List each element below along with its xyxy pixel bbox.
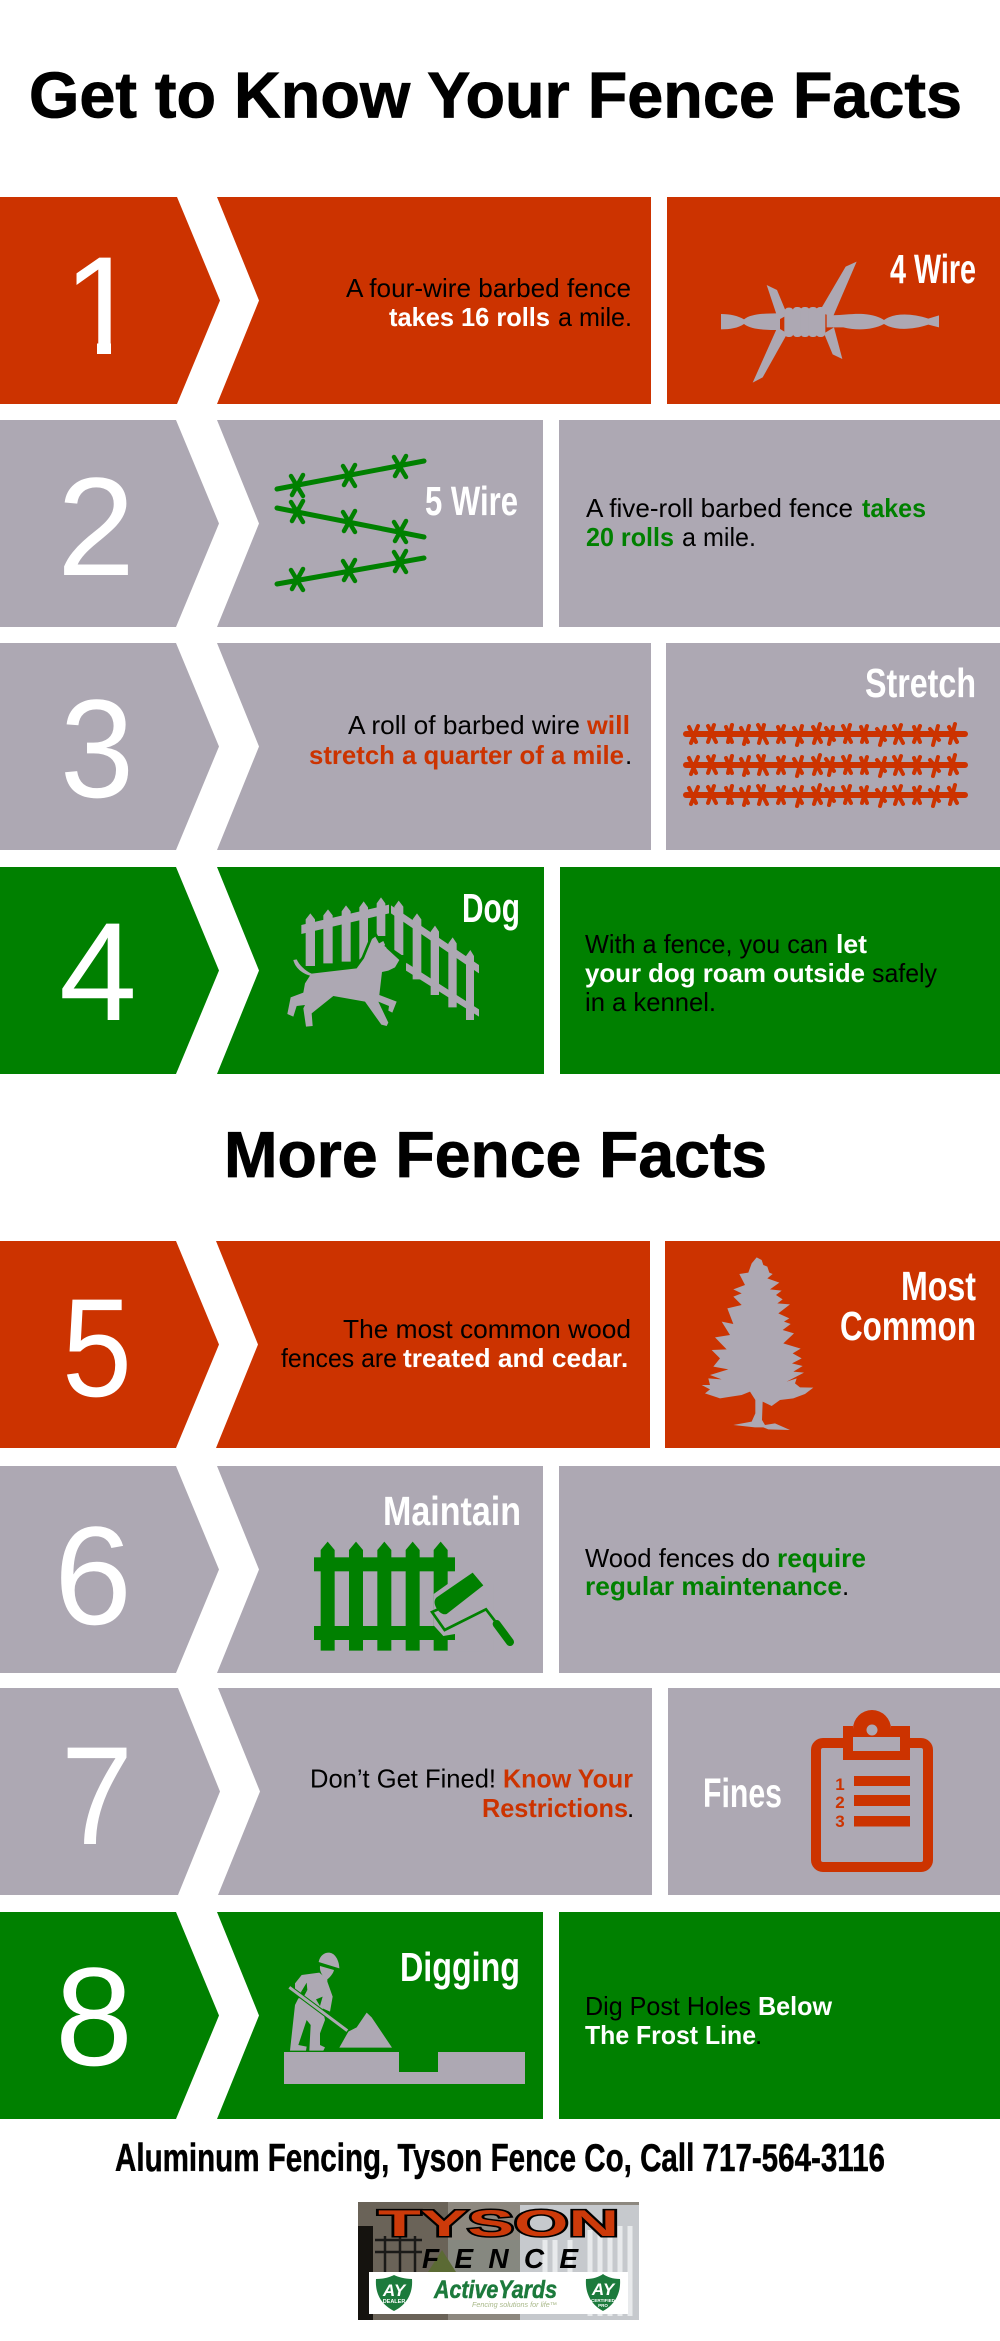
icon: man digging post hole (284, 1953, 525, 2084)
label: Most Common (840, 1263, 976, 1349)
number block 5: 5 (62, 1269, 132, 1426)
text panel: restrictions: Don’t Get Fined! (310, 1764, 496, 1794)
icon panel: digging (217, 1912, 543, 2119)
number block 4: 4 (59, 893, 137, 1050)
label: Most Common: Most (901, 1263, 976, 1309)
number block 6: 6 (54, 1497, 132, 1654)
logo photo background (358, 2202, 639, 2320)
label: Maintain: Maintain (383, 1488, 521, 1534)
icon panel: most common (665, 1241, 1000, 1448)
text panel: four-wire fence: a mile. (558, 302, 632, 332)
text panel: five-roll fence (559, 420, 1000, 627)
ActiveYards tagline: Fencing solutions for life™ (472, 2302, 557, 2309)
text panel: restrictions (218, 1688, 652, 1895)
text panel: roll stretch: stretch a quarter of a mile (309, 740, 624, 770)
text panel: frost line (559, 1912, 1000, 2119)
fact row 4 (0, 867, 1000, 1074)
text panel: five-roll fence: A five-roll barbed fence (586, 493, 853, 523)
section heading: More Fence Facts (224, 1118, 767, 1191)
text panel: roll stretch: A roll of barbed wire (348, 710, 580, 740)
badge: AY certified pro: CERTIFIED (591, 2298, 616, 2303)
text panel: roll stretch: will (586, 710, 630, 740)
number block 7 (0, 1688, 220, 1895)
text panel: frost line: Below (758, 1991, 833, 2021)
text panel: dog in a kennel: With a fence, you can (585, 929, 828, 959)
text panel: frost line: The Frost Line (585, 2020, 756, 2050)
number block 3: 3 (60, 670, 134, 827)
label: Dog: Dog (462, 885, 520, 931)
text panel: four-wire fence: A four-wire barbed fence (346, 273, 631, 303)
badge: AY dealer (376, 2275, 412, 2311)
text panel: dog in a kennel: safely (872, 958, 937, 988)
icon: dog and fence (287, 897, 479, 1027)
fact row 8 (0, 1912, 1000, 2119)
number block 6 (0, 1466, 219, 1673)
badge: AY certified pro (586, 2274, 620, 2311)
number block 8: 8 (55, 1938, 133, 2095)
text panel: frost line: Dig Post Holes (585, 1991, 751, 2021)
logo wordmark: TYSON: TYSON (378, 2203, 619, 2244)
text panel: five-roll fence: a mile. (682, 522, 756, 552)
text panel: maintenance (559, 1466, 1000, 1673)
number block 3 (0, 643, 219, 850)
text panel: common woods: The most common wood (343, 1314, 631, 1344)
number block 5 (0, 1241, 219, 1448)
text panel: four-wire fence: takes 16 rolls (389, 302, 550, 332)
icon panel: 4 wire (667, 197, 1000, 404)
fact row 7 (0, 1688, 1000, 1895)
text panel: four-wire fence (217, 197, 651, 404)
text panel: dog in a kennel: in a kennel. (585, 987, 716, 1017)
badge: AY certified pro: AY (591, 2280, 616, 2299)
fact row 5 (0, 1241, 1000, 1448)
icon: clipboard checklist (816, 1710, 928, 1867)
text panel: maintenance: . (842, 1571, 849, 1601)
title: Get to Know Your Fence Facts (29, 58, 962, 132)
text panel: maintenance: Wood fences do (585, 1543, 770, 1573)
text panel: dog in a kennel: your dog roam outside (585, 958, 865, 988)
icon panel: maintain (217, 1466, 543, 1673)
text panel: restrictions: . (627, 1793, 634, 1823)
text panel: dog in a kennel: let (836, 929, 867, 959)
icon panel: 5 wire (217, 420, 543, 627)
text panel: frost line: . (755, 2020, 762, 2050)
text panel: common woods (216, 1241, 650, 1448)
text panel: dog in a kennel (560, 867, 1000, 1074)
icon: picket fence and paint roller (314, 1542, 510, 1652)
number block 1 (0, 197, 220, 404)
label: Fines: Fines (703, 1770, 782, 1816)
number block 1: 1 (63, 227, 141, 384)
text panel: common woods: treated and cedar (403, 1343, 622, 1373)
text panel: five-roll fence: 20 rolls (586, 522, 674, 552)
fact row 6 (0, 1466, 1000, 1673)
text panel: roll stretch (217, 643, 651, 850)
text panel: common woods: fences are (281, 1343, 397, 1373)
text panel: maintenance: require (777, 1543, 866, 1573)
text panel: restrictions: Restrictions (482, 1793, 628, 1823)
icon panel: dog (217, 867, 544, 1074)
badge: AY certified pro: PRO (598, 2303, 608, 2308)
fact row 2 (0, 420, 1000, 627)
icon: clipboard checklist: 3 (835, 1812, 845, 1831)
number block 2 (0, 420, 219, 627)
icon: three green barbed wires (277, 456, 424, 590)
icon: pine tree (702, 1257, 813, 1430)
icon: barbed wire knot (721, 262, 939, 383)
badge: AY dealer: AY (382, 2281, 407, 2300)
fact row 3 (0, 643, 1000, 850)
label: 5 Wire: 5 Wire (425, 478, 518, 524)
badge: AY dealer: DEALER (383, 2299, 405, 2305)
fact row 1 (0, 197, 1000, 404)
icon panel: stretch (666, 643, 1000, 850)
text panel: maintenance: regular maintenance (585, 1571, 842, 1601)
number block 4 (0, 867, 219, 1074)
number block 7: 7 (61, 1717, 133, 1874)
number block 8 (0, 1912, 219, 2119)
text panel: common woods: . (621, 1343, 628, 1373)
ActiveYards wordmark: ActiveYards (433, 2276, 557, 2304)
logo wordmark: FENCE: FENCE (422, 2243, 579, 2274)
logo: Tyson Fence and ActiveYards (358, 2202, 639, 2320)
icon panel: fines (668, 1688, 1000, 1895)
number block 2: 2 (57, 448, 135, 605)
text panel: roll stretch: . (625, 740, 632, 770)
label: Digging: Digging (400, 1944, 520, 1990)
icon: clipboard checklist: 2 (835, 1793, 845, 1812)
text panel: five-roll fence: takes (862, 493, 926, 523)
icon: three orange barbed wires (686, 724, 965, 806)
icon: clipboard checklist: 1 (835, 1775, 845, 1794)
text panel: restrictions: Know Your (503, 1764, 633, 1794)
ActiveYards strip (369, 2272, 628, 2314)
